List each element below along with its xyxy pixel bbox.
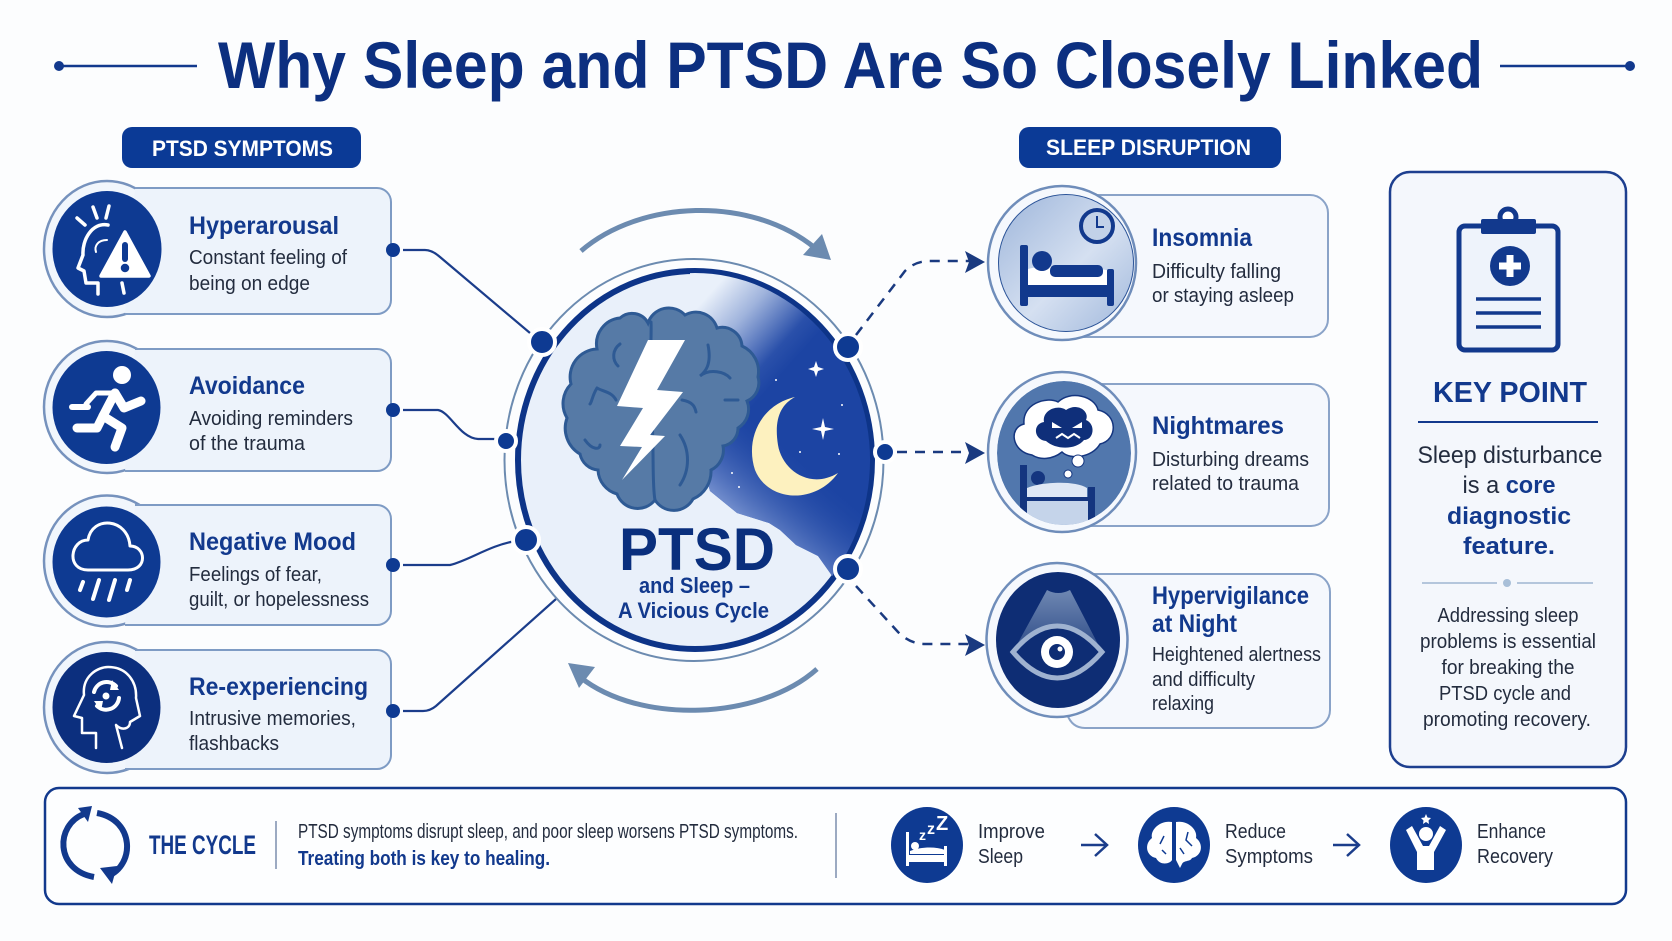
symptom name: Avoidance (189, 372, 305, 400)
card: Avoidance (44, 341, 391, 473)
card background (44, 496, 391, 626)
key statement: feature. (1463, 533, 1555, 560)
icon: medical clipboard (1459, 209, 1558, 350)
key statement: Sleep disturbance (1418, 442, 1602, 469)
icon: bed and clock (998, 194, 1134, 332)
symptom description (189, 564, 369, 611)
disruption name: at Night (1152, 610, 1238, 638)
divider (1422, 579, 1593, 587)
symptom description: being on edge (189, 273, 310, 295)
cycle arrow: bottom (568, 663, 817, 710)
icon: crescent moon (752, 397, 838, 496)
central title (618, 516, 775, 623)
card: Hyperarousal (44, 181, 391, 317)
disruption name: Hypervigilance (1152, 582, 1309, 610)
step: improve sleep: z (927, 821, 935, 838)
disruption name: Nightmares (1152, 412, 1284, 440)
panel: key point (1390, 172, 1626, 767)
symptom name: Hyperarousal (189, 212, 339, 240)
connectors: symptoms to centre (403, 250, 556, 711)
central title: PTSD (619, 516, 775, 583)
night sky (690, 273, 870, 576)
card: Negative Mood (44, 496, 391, 626)
disruption name: Insomnia (1152, 224, 1253, 252)
cycle arrow: top (581, 210, 831, 260)
panel: the cycle (45, 788, 1626, 904)
icon: head with warning triangle (77, 206, 149, 294)
disruption description (1152, 644, 1321, 715)
disruption name (1152, 582, 1309, 638)
icon: rain cloud (73, 523, 142, 600)
step: enhance recovery: Recovery (1477, 846, 1553, 868)
central PTSD and sleep circle (496, 259, 900, 661)
disruption description: Difficulty falling (1152, 261, 1281, 283)
disruption description (1152, 261, 1294, 307)
cycle description: PTSD symptoms disrupt sleep, and poor sleep worsens PTSD symptoms. (298, 821, 798, 843)
central title: and Sleep – (639, 573, 750, 598)
symptom name: Negative Mood (189, 528, 356, 556)
ring nodes (496, 329, 895, 582)
step: enhance recovery: Enhance (1477, 821, 1546, 843)
key statement (1418, 442, 1602, 560)
icon: watchful eye (996, 572, 1120, 708)
card: Re-experiencing (44, 642, 391, 773)
icon: running figure (72, 366, 141, 447)
heading: PTSD symptoms: PTSD SYMPTOMS (152, 136, 333, 161)
icon: lightning bolt (617, 340, 685, 480)
disruption description: Disturbing dreams (1152, 449, 1309, 471)
step: improve sleep: Z (936, 813, 948, 835)
step: reduce symptoms: Symptoms (1225, 846, 1313, 868)
cycle label: THE CYCLE (149, 830, 256, 860)
card: Nightmares (988, 372, 1329, 532)
card background (44, 341, 391, 473)
arrow (1333, 834, 1359, 856)
icon: brain (563, 308, 759, 510)
symptom description: Intrusive memories, (189, 708, 356, 730)
card background (988, 372, 1329, 532)
symptom description (189, 247, 347, 295)
disruption description: Heightened alertness (1152, 644, 1321, 666)
cycle description (298, 821, 798, 870)
step: improve sleep: Sleep (978, 846, 1023, 868)
supporting text: promoting recovery. (1423, 709, 1591, 731)
card background (44, 642, 391, 773)
step: reduce symptoms (1138, 807, 1313, 883)
card background (986, 563, 1330, 728)
key point heading: KEY POINT (1433, 377, 1587, 409)
icon: nightmare thought cloud over bed (997, 381, 1131, 525)
cycle description: Treating both is key to healing. (298, 848, 550, 870)
card connection dots (386, 243, 400, 718)
step: improve sleep (891, 807, 1045, 883)
symptom description (189, 708, 356, 755)
disruption description: related to trauma (1152, 473, 1300, 495)
symptom description: Avoiding reminders (189, 408, 353, 430)
key statement: is a core (1462, 472, 1556, 499)
step: improve sleep: z (919, 827, 926, 843)
heading: sleep disruption (1019, 127, 1281, 168)
connectors: centre to sleep disruption (856, 251, 985, 656)
icon: cycle arrows (63, 806, 127, 884)
arrow (1081, 834, 1107, 856)
heading: PTSD symptoms (122, 127, 361, 168)
heading: sleep disruption: SLEEP DISRUPTION (1046, 135, 1251, 160)
symptom description: guilt, or hopelessness (189, 589, 369, 611)
key statement: diagnostic (1447, 503, 1571, 530)
supporting text (1420, 605, 1596, 731)
symptom description (189, 408, 353, 455)
disruption description (1152, 449, 1309, 495)
step: enhance recovery (1390, 807, 1553, 883)
step: improve sleep: Improve (978, 821, 1045, 843)
icon: head with cycle (74, 667, 140, 748)
supporting text: Addressing sleep (1438, 605, 1578, 627)
stars (731, 361, 843, 488)
supporting text: problems is essential (1420, 631, 1596, 653)
symptom description: flashbacks (189, 733, 279, 755)
step: reduce symptoms: Reduce (1225, 821, 1286, 843)
symptom description: Constant feeling of (189, 247, 347, 269)
disruption description: relaxing (1152, 693, 1214, 715)
card background (44, 181, 391, 317)
symptom name: Re-experiencing (189, 673, 368, 701)
symptom description: Feelings of fear, (189, 564, 322, 586)
card background (988, 186, 1328, 340)
disruption description: and difficulty (1152, 669, 1255, 691)
card: Insomnia (988, 186, 1328, 340)
symptom description: of the trauma (189, 433, 306, 455)
supporting text: for breaking the (1442, 657, 1574, 679)
rings (504, 259, 884, 661)
central title: A Vicious Cycle (618, 598, 769, 623)
title: Why Sleep and PTSD Are So Closely Linked (218, 28, 1483, 102)
supporting text: PTSD cycle and (1439, 683, 1571, 705)
disruption description: or staying asleep (1152, 285, 1294, 307)
card: Hypervigilance at Night (986, 563, 1330, 728)
